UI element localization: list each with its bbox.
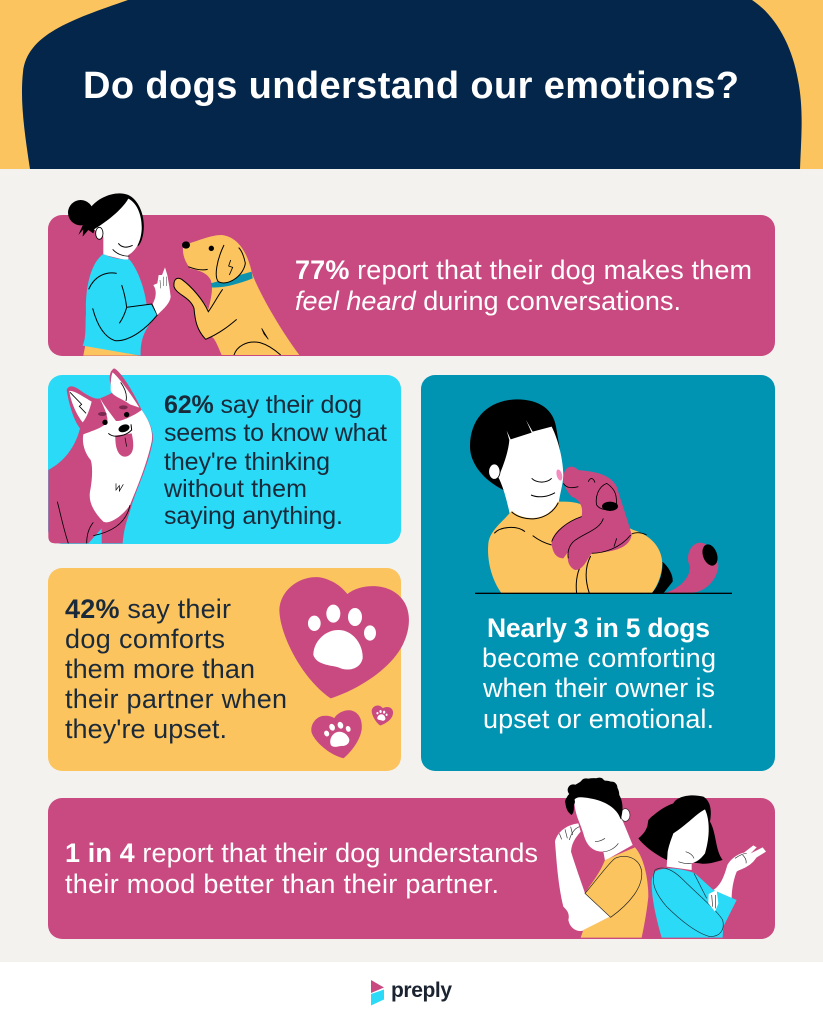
illustration: person kissed by dog <box>470 399 732 594</box>
text: nearly 3 in 5 dogs: when their owner is <box>482 673 715 703</box>
text: 42%: they're upset. <box>65 714 227 744</box>
panel: 42% <box>48 568 409 771</box>
logo wordmark: preply <box>391 979 452 1002</box>
text: 42%: them more than <box>65 654 255 684</box>
text: 42%: 42% say their <box>65 594 231 624</box>
text: nearly 3 in 5 dogs: upset or emotional. <box>483 704 714 734</box>
illustration: couple back to back <box>555 778 766 938</box>
text: 1 in 4: 1 in 4 report that their dog understands <box>65 838 538 868</box>
panel: feel heard <box>48 193 775 356</box>
text: nearly 3 in 5 dogs <box>482 613 716 734</box>
text: nearly 3 in 5 dogs: Nearly 3 in 5 dogs <box>487 613 710 643</box>
text: 1 in 4 <box>65 838 538 899</box>
icon: preply logo <box>371 980 384 1006</box>
illustration: corgi <box>48 368 153 543</box>
icon: paw hearts <box>279 577 409 766</box>
panel: 62% <box>48 368 401 544</box>
text: 62%: they're thinking <box>164 448 330 476</box>
text: 62%: without them <box>163 475 307 503</box>
footer <box>0 962 823 1024</box>
text: nearly 3 in 5 dogs: become comforting <box>482 643 716 673</box>
text: 77% <box>295 255 752 316</box>
text: 42% <box>65 594 287 744</box>
panel: 1 in 4 <box>48 778 775 939</box>
text: 77%: feel heard during conversations. <box>295 286 681 316</box>
text: 62%: seems to know what <box>164 419 387 447</box>
text: 42%: their partner when <box>65 684 287 714</box>
text: 42%: dog comforts <box>65 624 225 654</box>
text: 62%: 62% say their dog <box>164 391 362 419</box>
text: 62%: saying anything. <box>164 502 343 530</box>
text: 77%: 77% report that their dog makes them <box>295 255 752 285</box>
text: 62% <box>163 391 387 530</box>
title: Do dogs understand our emotions? <box>83 65 739 107</box>
panel: nearly 3 in 5 <box>421 375 775 771</box>
header band <box>0 0 823 169</box>
illustration: woman and dog high five <box>68 193 299 356</box>
text: 1 in 4: their mood better than their partner. <box>65 869 499 899</box>
